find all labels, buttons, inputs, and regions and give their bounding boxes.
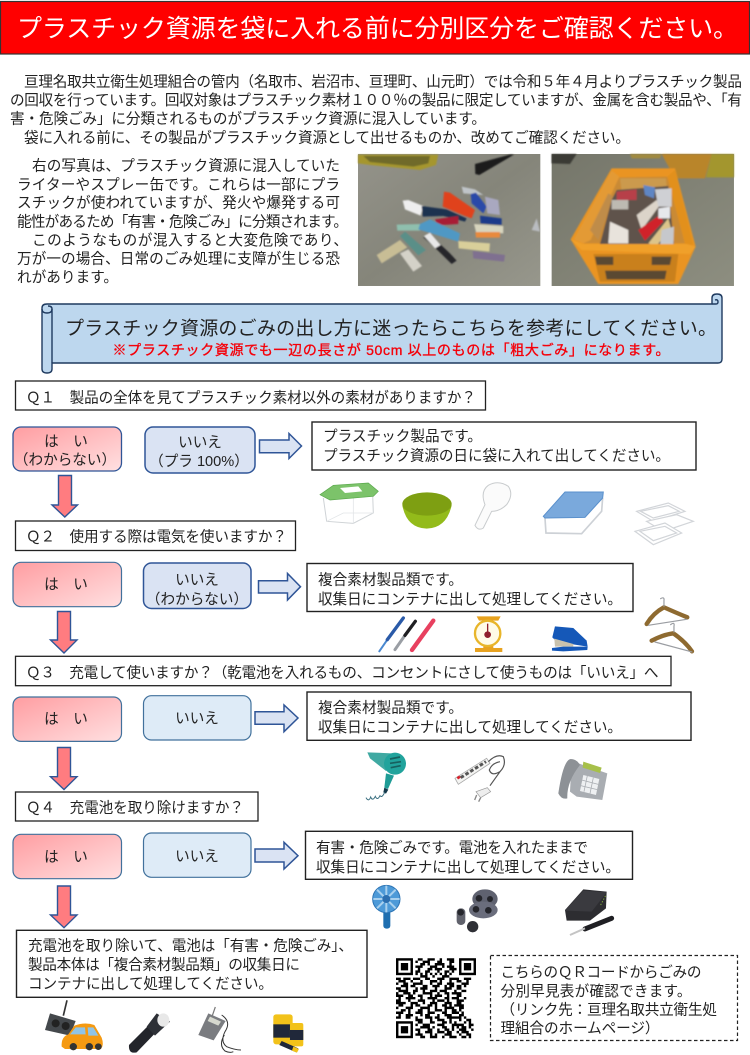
intro paragraph: 袋に入れる前に、その製品がプラスチック資源として出せるものか、改めてご確認ください。	[24, 129, 630, 146]
result box: Q4: 有害・危険ごみです。電池を入れたままで	[316, 840, 588, 857]
icon: hangers	[647, 598, 692, 652]
explanation of photos: このようなものが混入すると大変危険であり、	[32, 232, 348, 249]
answer yes: Q1: は い	[44, 434, 88, 450]
arrow: Q3 right	[255, 705, 298, 732]
answer no: Q2: いいえ	[175, 572, 219, 588]
icon: wireless earbuds	[457, 889, 498, 932]
result box: Q3: 収集日にコンテナに出して処理してください。	[318, 719, 622, 736]
answer yes: Q2	[13, 562, 122, 607]
explanation of photos: スチックが使われていますが、発火や爆発する可	[17, 194, 340, 212]
answer no: Q1: （プラ 100%）	[149, 453, 249, 470]
icon: telephone	[558, 759, 607, 800]
QR code note: 理組合のホームページ）	[500, 1020, 660, 1037]
icon: power strip	[455, 756, 504, 802]
answer yes: Q2: は い	[44, 577, 88, 593]
explanation of photos: 万が一の場合、日常のごみ処理に支障が生じる恐	[17, 250, 340, 268]
QR code note	[490, 956, 738, 1040]
icon: green bowl	[402, 492, 452, 529]
result box: Q2: 収集日にコンテナに出して処理してください。	[318, 591, 622, 608]
result box: remove battery: コンテナに出して処理してください。	[28, 976, 273, 993]
arrow: Q2 down	[50, 612, 77, 653]
answer yes: Q4: は い	[44, 850, 88, 866]
answer yes: Q4	[13, 834, 122, 879]
result box: Q1: プラスチック製品です。	[323, 428, 482, 445]
answer no: Q3	[144, 696, 251, 740]
answer no: Q1	[145, 427, 255, 473]
question 3	[16, 656, 671, 686]
QR code note: こちらのＱＲコードからごみの	[500, 964, 702, 981]
result box: Q2	[307, 564, 633, 612]
answer no: Q2: （わからない）	[146, 591, 248, 608]
result box: Q1: プラスチック資源の日に袋に入れて出してください。	[323, 447, 670, 464]
explanation of photos: ライターやスプレー缶です。これらは一部にプラ	[17, 176, 340, 193]
answer no: Q3: いいえ	[175, 711, 219, 727]
intro paragraph: 害・危険ごみ」に分類されるものがプラスチック資源に混入しています。	[10, 110, 486, 128]
explanation of photos: 右の写真は、プラスチック資源に混入していた	[32, 157, 340, 174]
answer no: Q4: いいえ	[175, 849, 219, 865]
result box: Q2: 複合素材製品類です。	[318, 572, 463, 589]
question 4: Ｑ４ 充電池を取り除けますか？	[26, 800, 244, 817]
banner heading: プラスチック資源のごみの出し方に迷ったらこちらを参考にしてください。	[65, 318, 717, 340]
arrow: Q4 down	[50, 886, 77, 928]
arrow: Q2 right	[258, 574, 300, 600]
question 3: Ｑ３ 充電して使いますか？（乾電池を入れるもの、コンセントにさして使うものは「いいえ」へ	[26, 664, 658, 681]
icon: blue stapler	[552, 626, 588, 651]
answer yes: Q1	[13, 427, 122, 471]
question 4	[16, 792, 258, 821]
QR code note: 分別早見表が確認できます。	[500, 983, 692, 1000]
photo: orange crate of mixed waste	[552, 154, 734, 286]
question 1	[16, 381, 486, 410]
scroll banner	[42, 294, 722, 373]
result box: Q4: 収集日にコンテナに出して処理してください。	[316, 859, 620, 876]
scroll shape	[42, 294, 722, 373]
answer yes: Q1: （わからない）	[14, 452, 116, 468]
icon: kitchen scale	[475, 616, 502, 652]
QR code note: （リンク先：亘理名取共立衛生処	[500, 1001, 717, 1018]
icon: pens	[379, 618, 433, 651]
icon: radio controlled car	[45, 1000, 103, 1050]
result box: remove battery: 充電池を取り除いて、電池は「有害・危険ごみ」、	[28, 938, 353, 955]
icon: insect case with green lid	[320, 483, 378, 523]
QR code	[395, 957, 477, 1040]
answer yes: Q3: は い	[44, 712, 88, 728]
intro paragraph: 亘理名取共立衛生処理組合の管内（名取市、岩沼市、亘理町、山元町）では令和５年４月よりプラスチック製品	[24, 72, 742, 90]
icon: rice paddle	[475, 483, 511, 529]
icon: portable radio with earphones	[198, 1007, 241, 1052]
arrow: Q1 down	[52, 476, 78, 517]
question 1: Ｑ１ 製品の全体を見てプラスチック素材以外の素材がありますか？	[26, 389, 476, 406]
result box: Q3: 複合素材製品類です。	[318, 700, 463, 717]
photo: pile of lighters and spray cans on floor	[358, 154, 540, 286]
answer yes: Q3	[13, 697, 122, 741]
explanation of photos: 能性があるため「有害・危険ごみ」に分類されます。	[17, 213, 348, 230]
answer no: Q4	[144, 833, 251, 877]
result box: Q1	[312, 422, 696, 470]
question 2	[16, 521, 296, 550]
icon: hair dryer	[366, 752, 406, 800]
icon: power bank and cable	[565, 889, 612, 935]
answer no: Q1: いいえ	[178, 435, 222, 451]
intro paragraph: の回収を行っています。回収対象はプラスチック素材１００％の製品に限定していますが、金属を含む製品や、「有	[10, 92, 742, 109]
result box: Q4	[306, 831, 632, 879]
icon: handheld fan	[373, 885, 400, 929]
arrow: Q3 down	[50, 748, 77, 790]
result box: remove battery: 製品本体は「複合素材製品類」の収集日に	[28, 956, 300, 973]
icon: blue lid container	[543, 492, 603, 534]
arrow: Q4 right	[255, 842, 298, 869]
answer no: Q2	[144, 563, 251, 608]
icon: clear trays	[635, 503, 693, 545]
explanation of photos: れがあります。	[17, 269, 118, 286]
icon: flashlight	[129, 1013, 170, 1053]
title banner: プラスチック資源を袋に入れる前に分別区分をご確認ください。	[17, 15, 738, 43]
result box: Q3	[307, 692, 691, 740]
icon: batteries	[273, 1014, 303, 1053]
title banner	[0, 2, 750, 54]
question 2: Ｑ２ 使用する際は電気を使いますか？	[26, 528, 287, 546]
banner note: ※プラスチック資源でも一辺の長さが 50cm 以上のものは「粗大ごみ」になります。	[112, 342, 670, 358]
result box: remove battery	[16, 930, 367, 997]
arrow: Q1 right	[260, 434, 302, 458]
